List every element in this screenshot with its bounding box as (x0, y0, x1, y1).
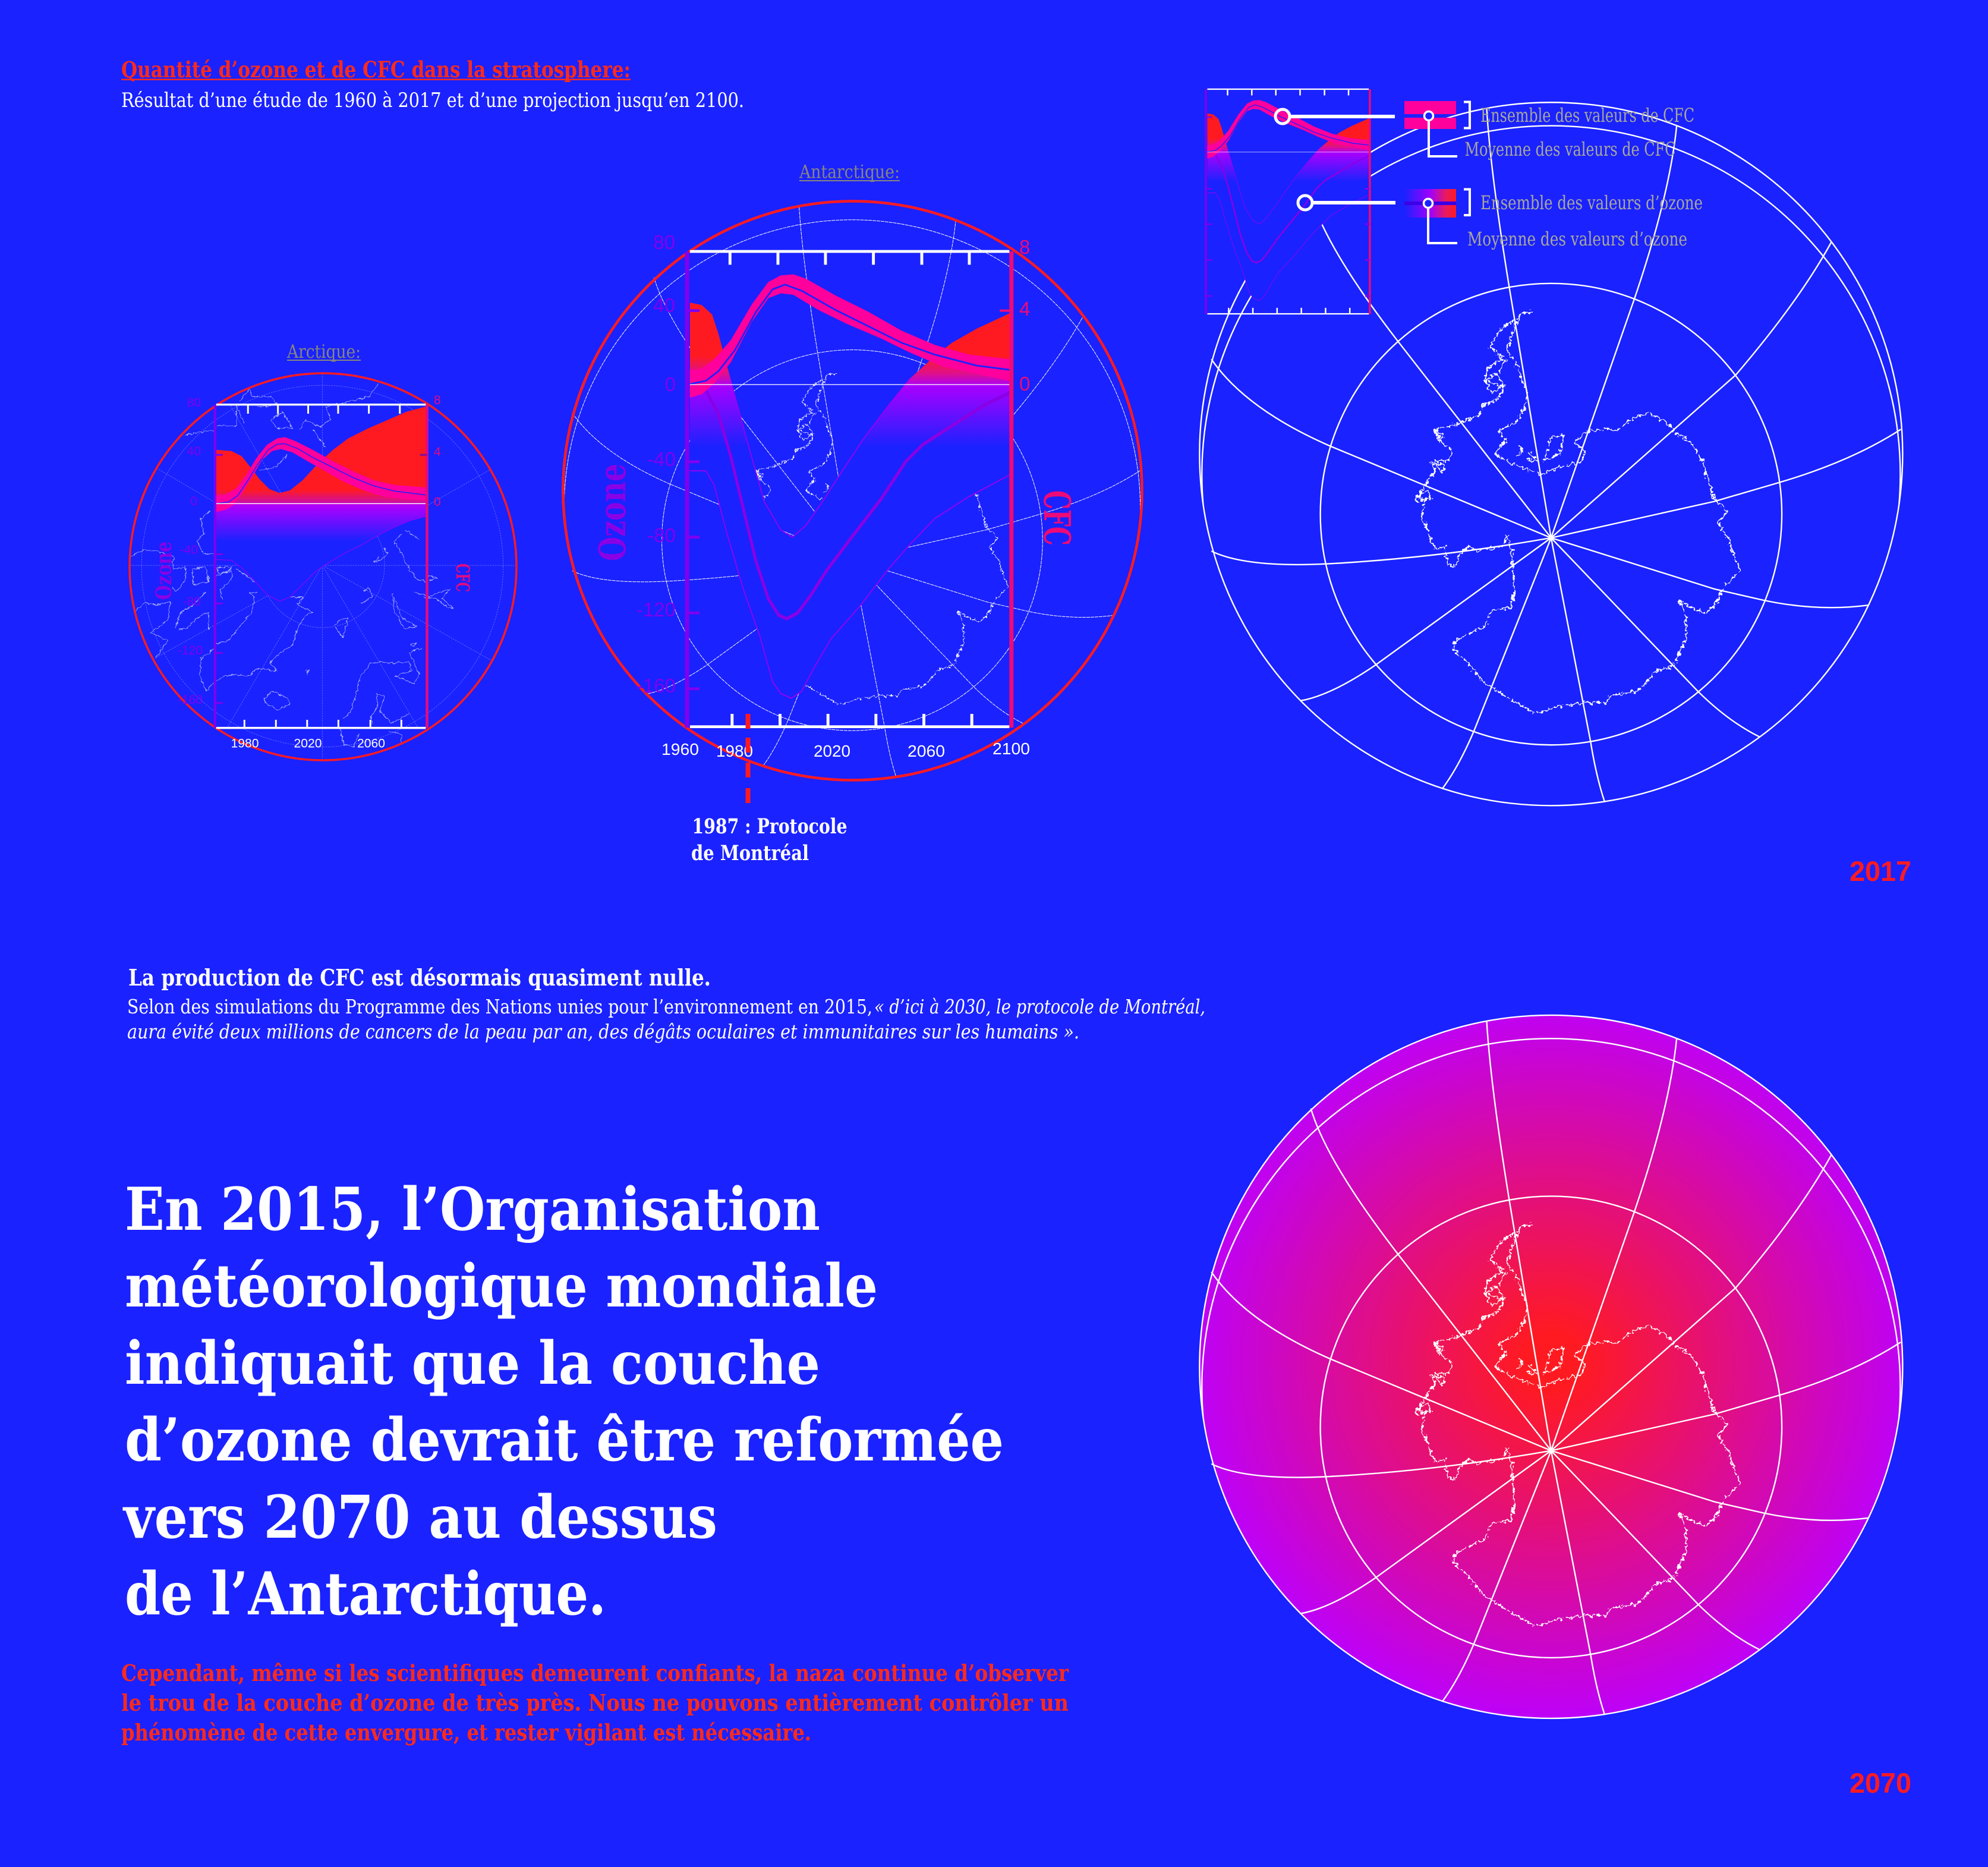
label: CFC: CFC (1035, 490, 1079, 546)
axes (215, 405, 427, 728)
Arctic year labels: 1980 (231, 737, 259, 750)
year label 2017: 2017 (1850, 855, 1911, 887)
annotation: Protocole de Montréal: 1987 : Protocole (692, 814, 848, 839)
Antarctic year labels: 2020 (814, 742, 850, 760)
Antarctic CFC scale: 4 (1019, 298, 1030, 320)
legend: CFC callout: Moyenne des valeurs de CFC (1464, 138, 1676, 160)
zero line (216, 503, 426, 505)
ozone envelope outlines (690, 379, 1010, 698)
Antarctic year labels: 1980 (716, 742, 753, 760)
label: CFC: CFC (452, 563, 473, 592)
Antarctic ozone scale: -40 (647, 448, 676, 470)
Antarctic ozone scale: -80 (647, 524, 676, 546)
main statement: d’ozone devrait être reformée (125, 1406, 1004, 1475)
Arctic year labels: 2020 (294, 737, 322, 750)
title: quantité d'ozone et de CFC: Quantité d’ozone et de CFC dans la stratosphere: (121, 56, 631, 83)
Arctic ozone scale: -40 (180, 543, 198, 557)
Arctic ozone scale: -80 (183, 595, 201, 609)
panel: Arctique chart (130, 341, 516, 760)
panel: globe 2017 (1199, 89, 1911, 887)
main statement: de l’Antarctique. (125, 1560, 606, 1629)
CFC mean (690, 285, 1010, 384)
CFC mean (216, 443, 426, 503)
annotation: Protocole de Montréal (691, 814, 848, 865)
text block: production de CFC: La production de CFC est désormais quasiment nulle. (128, 964, 711, 991)
Arctic year labels: 2060 (357, 737, 385, 750)
Antarctic ozone scale: -160 (637, 675, 676, 697)
Antarctic year labels (661, 739, 1030, 760)
Antarctic CFC scale: 8 (1019, 236, 1030, 258)
panel: Antarctique chart (562, 162, 1142, 865)
Antarctic year labels: 1960 (661, 740, 699, 758)
Antarctic ozone scale: 0 (665, 373, 676, 395)
red ring (130, 373, 516, 760)
red paragraph: le trou de la couche d’ozone de très près. Nous ne pouvons entièrement contrôler un (121, 1689, 1069, 1716)
ozone envelope lower line (216, 517, 426, 601)
Arctic ozone scale (178, 396, 203, 707)
annotation: Protocole de Montréal: de Montréal (691, 841, 809, 865)
text block: production de CFC (127, 964, 1205, 1043)
graticule and Antarctica coast 2017 (1199, 102, 1902, 805)
ozone envelope (690, 303, 1010, 698)
main statement: En 2015, l’Organisation (125, 1175, 820, 1244)
Arctic ozone scale: -120 (178, 644, 203, 657)
Antarctic CFC scale (1019, 236, 1030, 395)
Antarctic ozone scale: 80 (653, 231, 675, 253)
marker: 1987 dashed line (745, 714, 750, 807)
Arctic CFC scale (434, 393, 441, 509)
Antarctic year labels: 2060 (908, 742, 945, 760)
label: Ozone: Ozone (591, 464, 634, 561)
legend: ozone callout: Moyenne des valeurs d’ozone (1467, 228, 1687, 250)
inset chart (1206, 89, 1370, 314)
legend: ozone callout: Ensemble des valeurs d’ozone (1480, 191, 1703, 214)
year label 2070: 2070 (1850, 1767, 1911, 1799)
Arctic CFC scale: 4 (434, 445, 441, 459)
main statement (122, 1175, 1004, 1629)
graticule and Antarctica coast 2070 (1199, 1015, 1902, 1718)
red paragraph: phénomène de cette envergure, et rester vigilant est nécessaire. (121, 1719, 811, 1746)
polar map of the Arctic (130, 374, 515, 759)
Arctic CFC scale: 8 (434, 393, 441, 407)
panel: globe 2070 (1199, 1015, 1911, 1799)
filled gradient disc (1199, 1015, 1903, 1719)
polar map behind chart (562, 200, 1142, 780)
legend: CFC callout: Ensemble des valeurs de CFC (1480, 104, 1694, 127)
Antarctic CFC scale: 0 (1019, 373, 1030, 395)
CFC envelope (216, 437, 426, 512)
Antarctic ozone scale (637, 231, 676, 697)
Antarctic curves and axes (687, 251, 1012, 728)
label: Ozone: Ozone (152, 541, 177, 600)
subtitle: Résultat d’une étude de 1960 à 2017 et d’une projection jusqu’en 2100. (121, 89, 744, 112)
red paragraph: Cependant, même si les scientifiques demeurent confiants, la naza continue d’observer (121, 1660, 1069, 1686)
legend: ozone callout (1298, 189, 1703, 250)
Arctic year labels (231, 737, 385, 750)
legend: CFC callout (1275, 101, 1694, 160)
red paragraph (121, 1660, 1069, 1746)
ozone envelope (216, 407, 426, 601)
heading: Antarctique: Antarctique: (799, 162, 900, 183)
main statement: météorologique mondiale (125, 1252, 878, 1321)
heading: Arctique: Arctique: (286, 341, 361, 363)
text block: production de CFC: Selon des simulations du Programme des Nations unies pour l’environnement en 2015, (127, 995, 872, 1018)
text block: production de CFC: « d’ici à 2030, le protocole de Montréal, (874, 995, 1205, 1018)
red ring (563, 201, 1142, 780)
axes (687, 251, 1012, 728)
Arctic ozone scale: 0 (190, 495, 197, 508)
main statement: vers 2070 au dessus (122, 1483, 717, 1552)
zero line (690, 384, 1010, 385)
CFC envelope (690, 275, 1010, 398)
Arctic CFC scale: 0 (434, 495, 441, 509)
Arctic ozone scale: 40 (187, 445, 201, 458)
Antarctic ozone scale: 40 (653, 294, 675, 316)
text block: production de CFC: aura évité deux millions de cancers de la peau par an, des dégâts oculaires et immunitaires sur les humains ». (127, 1020, 1079, 1043)
Arctic ozone scale: -160 (178, 693, 203, 707)
Antarctic year labels: 2100 (993, 739, 1030, 758)
Antarctic ozone scale: -120 (637, 599, 676, 621)
Arctic curves and axes (215, 405, 427, 728)
Arctic ozone scale: 80 (187, 396, 201, 410)
ozone mean (690, 385, 1010, 619)
main statement: indiquait que la couche (125, 1329, 820, 1398)
